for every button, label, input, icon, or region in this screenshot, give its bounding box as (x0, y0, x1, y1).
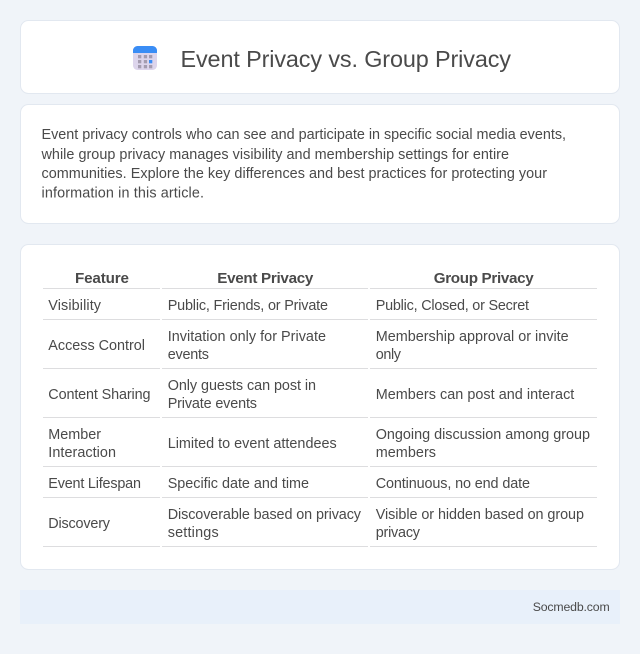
row: content sharing (48, 378, 574, 412)
text block: introduction paragraph: while group privacy manages visibility and membership settings for entire (40, 147, 509, 163)
row: event lifespan: Continuous, no end date (376, 476, 530, 492)
footer bar (20, 590, 620, 624)
row: discovery: privacy (376, 525, 421, 541)
text block: introduction paragraph: information in this article. (42, 186, 204, 202)
row: access control: Access Control (48, 338, 145, 354)
row: discovery (48, 507, 584, 541)
panel: comparison table (20, 244, 620, 570)
table header row: Feature (75, 270, 129, 287)
footer source text: Socmedb.com (533, 600, 610, 614)
row: visibility (48, 298, 529, 314)
row: discovery: settings (168, 525, 219, 541)
panel: introduction (20, 104, 620, 224)
row: access control: only (376, 347, 402, 363)
icon: calendar (133, 46, 157, 70)
table header row (75, 270, 534, 287)
row: event lifespan (48, 476, 530, 492)
row: member interaction: members (376, 445, 436, 461)
panel: title header (20, 20, 620, 94)
row: member interaction: Interaction (48, 445, 116, 461)
row: member interaction: Ongoing discussion among group (376, 427, 590, 443)
row: discovery: Discovery (48, 516, 111, 532)
table header row: Group Privacy (434, 270, 534, 287)
text block: introduction paragraph: Event privacy controls who can see and participate in specific social media events, (42, 127, 566, 143)
row: access control (48, 329, 569, 363)
row: visibility: Public, Friends, or Private (168, 298, 328, 314)
row: content sharing: Private events (168, 396, 257, 412)
text block: introduction paragraph: communities. Explore the key differences and best practices for protecting your (42, 166, 547, 182)
row: member interaction: Member (48, 427, 101, 443)
row: access control: Invitation only for Private (168, 329, 326, 345)
row: access control: Membership approval or invite (376, 329, 569, 345)
row: discovery: Discoverable based on privacy (168, 507, 362, 523)
row: member interaction (48, 427, 590, 461)
row: access control: events (168, 347, 209, 363)
text block: introduction paragraph (40, 127, 566, 202)
table header row: Event Privacy (217, 270, 314, 287)
row: content sharing: Only guests can post in (168, 378, 316, 394)
row: visibility: Public, Closed, or Secret (376, 298, 529, 314)
row: content sharing: Members can post and interact (376, 387, 574, 403)
row: content sharing: Content Sharing (48, 387, 150, 403)
row: visibility: Visibility (48, 298, 102, 314)
title: Event Privacy vs. Group Privacy (180, 46, 511, 72)
row: event lifespan: Event Lifespan (48, 476, 141, 492)
row: event lifespan: Specific date and time (168, 476, 309, 492)
row: member interaction: Limited to event attendees (168, 436, 337, 452)
row: discovery: Visible or hidden based on group (376, 507, 584, 523)
